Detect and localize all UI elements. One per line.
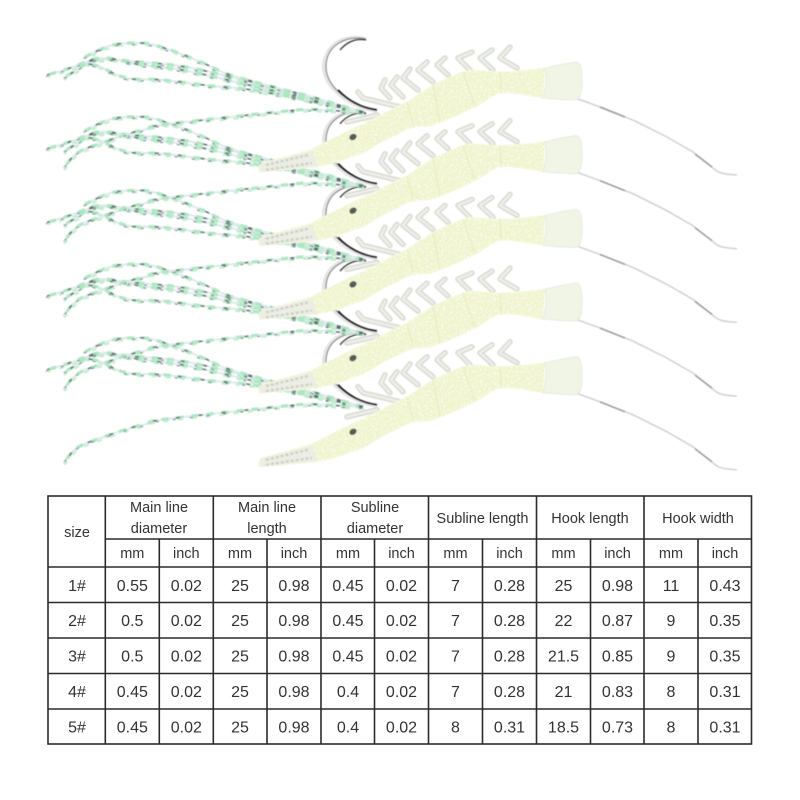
unit row: mm [336, 546, 360, 562]
table header [64, 500, 734, 541]
row 5#: 8 [667, 720, 676, 736]
row 2# [68, 613, 741, 630]
table header: Main line [238, 500, 296, 516]
row 1#: 0.98 [602, 578, 633, 595]
table header: length [247, 521, 287, 537]
unit row: mm [443, 546, 468, 562]
row 4#: 0.83 [602, 684, 633, 701]
row 1# [68, 578, 741, 595]
unit row: inch [604, 546, 631, 562]
unit row: mm [120, 546, 144, 562]
row 4#: 0.4 [337, 684, 359, 701]
row 5#: 0.45 [117, 720, 148, 736]
row 1#: 25 [231, 578, 249, 595]
row 2#: 0.45 [332, 613, 364, 630]
table header: Subline length [437, 511, 528, 527]
row 3#: 0.45 [332, 648, 364, 666]
row 1#: 0.98 [278, 578, 310, 595]
table grid [48, 496, 752, 744]
row 3# [68, 648, 741, 666]
row 5#: 25 [231, 720, 249, 736]
row 2#: 22 [555, 613, 572, 630]
row 5#: 8 [451, 720, 460, 736]
row 1#: 25 [555, 578, 572, 595]
row 2#: 0.28 [494, 613, 525, 630]
unit row: mm [659, 546, 683, 562]
row 2#: 0.02 [171, 613, 202, 630]
unit row [120, 546, 738, 562]
row 3#: 0.35 [709, 648, 741, 666]
row 1#: 0.55 [117, 578, 148, 595]
row 1#: 1# [68, 578, 86, 595]
lure 2 [46, 111, 737, 249]
table header: Subline [351, 500, 399, 516]
row 2#: 0.02 [386, 613, 417, 630]
unit row: inch [388, 546, 415, 562]
row 4#: 0.98 [278, 684, 310, 701]
row 2#: 0.35 [709, 613, 741, 630]
row 5#: 0.31 [494, 720, 525, 736]
lure group: five glow shrimp lures [46, 38, 737, 470]
row 3#: 0.98 [278, 648, 310, 666]
row 1#: 7 [451, 578, 460, 595]
table header: diameter [131, 521, 187, 537]
row 4#: 8 [667, 684, 676, 701]
row 5#: 5# [68, 720, 86, 736]
row 1#: 0.02 [386, 578, 417, 595]
unit row: inch [173, 546, 200, 562]
row 4#: 0.45 [117, 684, 148, 701]
row 5#: 0.02 [171, 720, 202, 736]
unit row: mm [228, 546, 252, 562]
lure 5 [46, 333, 737, 470]
row 3#: 7 [451, 648, 460, 666]
row 1#: 0.43 [709, 578, 741, 595]
row 1#: 11 [663, 578, 679, 595]
row 4#: 0.28 [494, 684, 525, 701]
row 1#: 0.28 [494, 578, 525, 595]
row 4# [68, 684, 741, 701]
row 4#: 0.02 [171, 684, 202, 701]
row 1#: 0.45 [332, 578, 364, 595]
unit row: inch [281, 546, 307, 562]
row 2#: 9 [667, 613, 676, 630]
row 5#: 0.73 [602, 720, 633, 736]
row 3#: 25 [231, 648, 249, 666]
row 3#: 0.5 [121, 648, 144, 666]
row 3#: 0.28 [494, 648, 525, 666]
row 3#: 3# [68, 648, 86, 666]
unit row: inch [712, 546, 738, 562]
unit row: mm [551, 546, 576, 562]
row 5#: 0.31 [709, 720, 741, 736]
row 5#: 0.02 [386, 720, 417, 736]
row 3#: 21.5 [548, 648, 579, 666]
row 4#: 25 [231, 684, 249, 701]
row 4#: 7 [451, 684, 460, 701]
table header: diameter [347, 521, 403, 537]
row 2#: 2# [68, 613, 86, 630]
row 5# [68, 720, 741, 736]
row 5#: 0.98 [278, 720, 310, 736]
row 4#: 0.31 [709, 684, 741, 701]
row 3#: 0.85 [602, 648, 633, 666]
unit row: inch [496, 546, 523, 562]
table header: size [64, 525, 90, 541]
row 4#: 4# [68, 684, 86, 701]
row 2#: 7 [451, 613, 460, 630]
row 3#: 0.02 [386, 648, 417, 666]
row 3#: 0.02 [171, 648, 202, 666]
lure 4 [46, 259, 737, 396]
row 1#: 0.02 [171, 578, 202, 595]
row 4#: 0.02 [386, 684, 417, 701]
row 5#: 18.5 [548, 720, 579, 736]
lure 3 [46, 185, 737, 322]
row 5#: 0.4 [337, 720, 359, 736]
table header: Hook length [551, 511, 629, 527]
row 2#: 0.5 [121, 613, 144, 630]
row 2#: 0.98 [278, 613, 310, 630]
row 2#: 25 [231, 613, 249, 630]
lure 1 [46, 38, 737, 175]
row 4#: 21 [555, 684, 572, 701]
table header: Main line [130, 500, 188, 516]
row 3#: 9 [667, 648, 676, 666]
size table [48, 496, 752, 744]
table header: Hook width [662, 511, 734, 527]
row 2#: 0.87 [602, 613, 633, 630]
